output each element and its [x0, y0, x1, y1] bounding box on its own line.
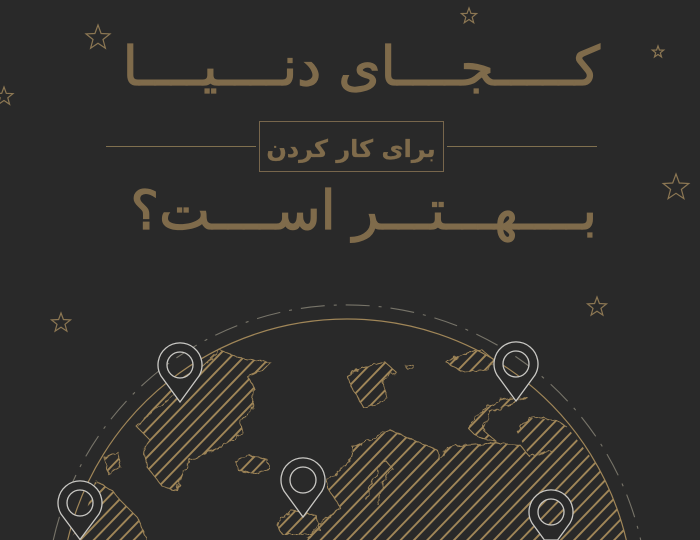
pin 1 — [158, 343, 202, 402]
subtitle with rules — [106, 122, 597, 172]
title line 2: بــــهـــتـــر اســــت؟ — [130, 179, 597, 242]
title line 1: کـــــجــــای دنــــیــــا — [123, 35, 600, 98]
world map coastlines — [97, 350, 567, 538]
map pins — [58, 342, 573, 540]
pin 2 — [58, 481, 102, 540]
pin 4 — [494, 342, 538, 401]
pin 3 — [281, 458, 325, 517]
globe outline — [53, 305, 641, 540]
stars — [0, 8, 689, 331]
subtitle with rules: برای کار کردن — [266, 135, 436, 163]
world map hatching — [60, 340, 640, 540]
pin 5 — [529, 490, 573, 540]
